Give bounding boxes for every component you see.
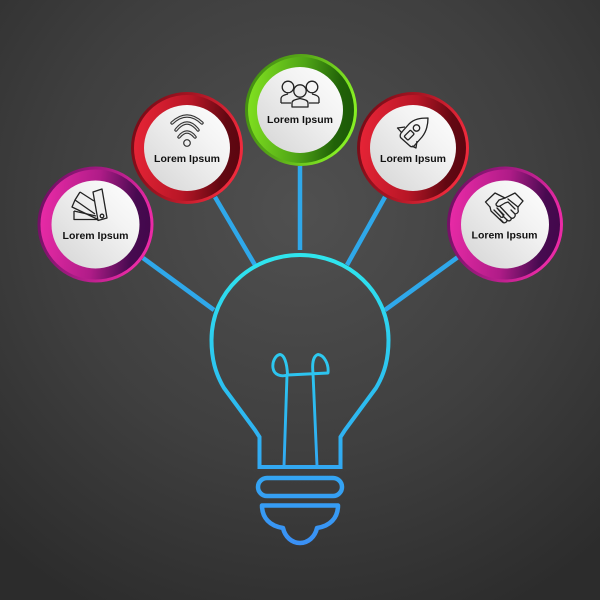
node: team (245, 54, 357, 166)
node: rocket (357, 92, 469, 204)
label: Lorem Ipsum (63, 230, 128, 242)
screw cap ring (258, 478, 342, 496)
icon: wifi (172, 116, 202, 146)
label: Lorem Ipsum (380, 153, 446, 165)
label: Lorem Ipsum (267, 114, 333, 126)
node: swatches (38, 166, 154, 282)
node: wifi (131, 92, 243, 204)
icon: colour swatches (72, 189, 107, 220)
icon: handshake (486, 193, 523, 223)
icon: rocket (398, 118, 428, 148)
bulb base (262, 506, 338, 543)
light bulb (212, 255, 388, 543)
label: Lorem Ipsum (472, 230, 537, 242)
node: handshake (447, 166, 563, 282)
label: Lorem Ipsum (154, 153, 220, 165)
filament (273, 354, 328, 466)
connector lines (143, 166, 458, 310)
bulb glass outline (212, 255, 388, 467)
icon: people (281, 81, 319, 107)
